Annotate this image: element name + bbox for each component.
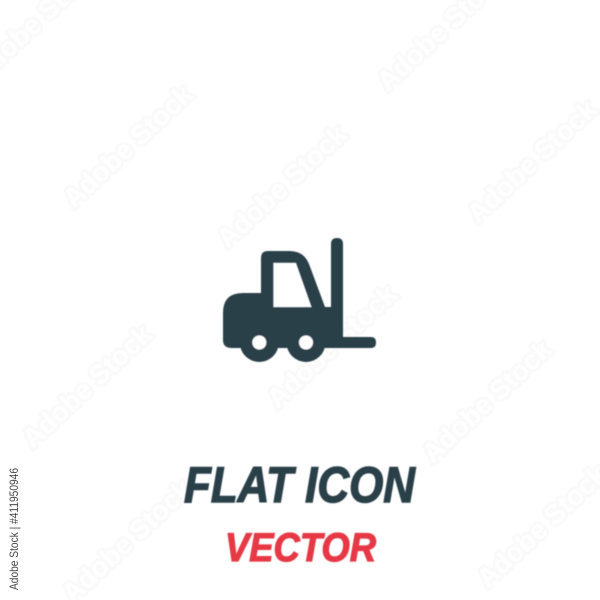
watermark pattern: Adobe Stock xyxy=(16,319,158,454)
rear wheel hub xyxy=(299,336,313,350)
forklift body and cabin xyxy=(223,238,376,348)
stock credit: Adobe Stock | #411950946 xyxy=(7,468,21,590)
watermark pattern: Adobe Stock xyxy=(416,334,558,469)
watermark pattern: Adobe Stock xyxy=(461,94,600,229)
watermark pattern: Adobe Stock xyxy=(261,279,403,414)
watermark pattern: Adobe Stock xyxy=(211,119,353,254)
icon: forklift xyxy=(223,238,376,362)
heading: flat icon: FLAT ICON xyxy=(184,457,416,513)
rear wheel arch xyxy=(286,323,326,362)
front wheel hub xyxy=(252,336,266,350)
watermark pattern: Adobe Stock xyxy=(57,79,199,214)
front wheel arch xyxy=(240,323,279,362)
heading: vector: VECTOR xyxy=(225,526,376,570)
